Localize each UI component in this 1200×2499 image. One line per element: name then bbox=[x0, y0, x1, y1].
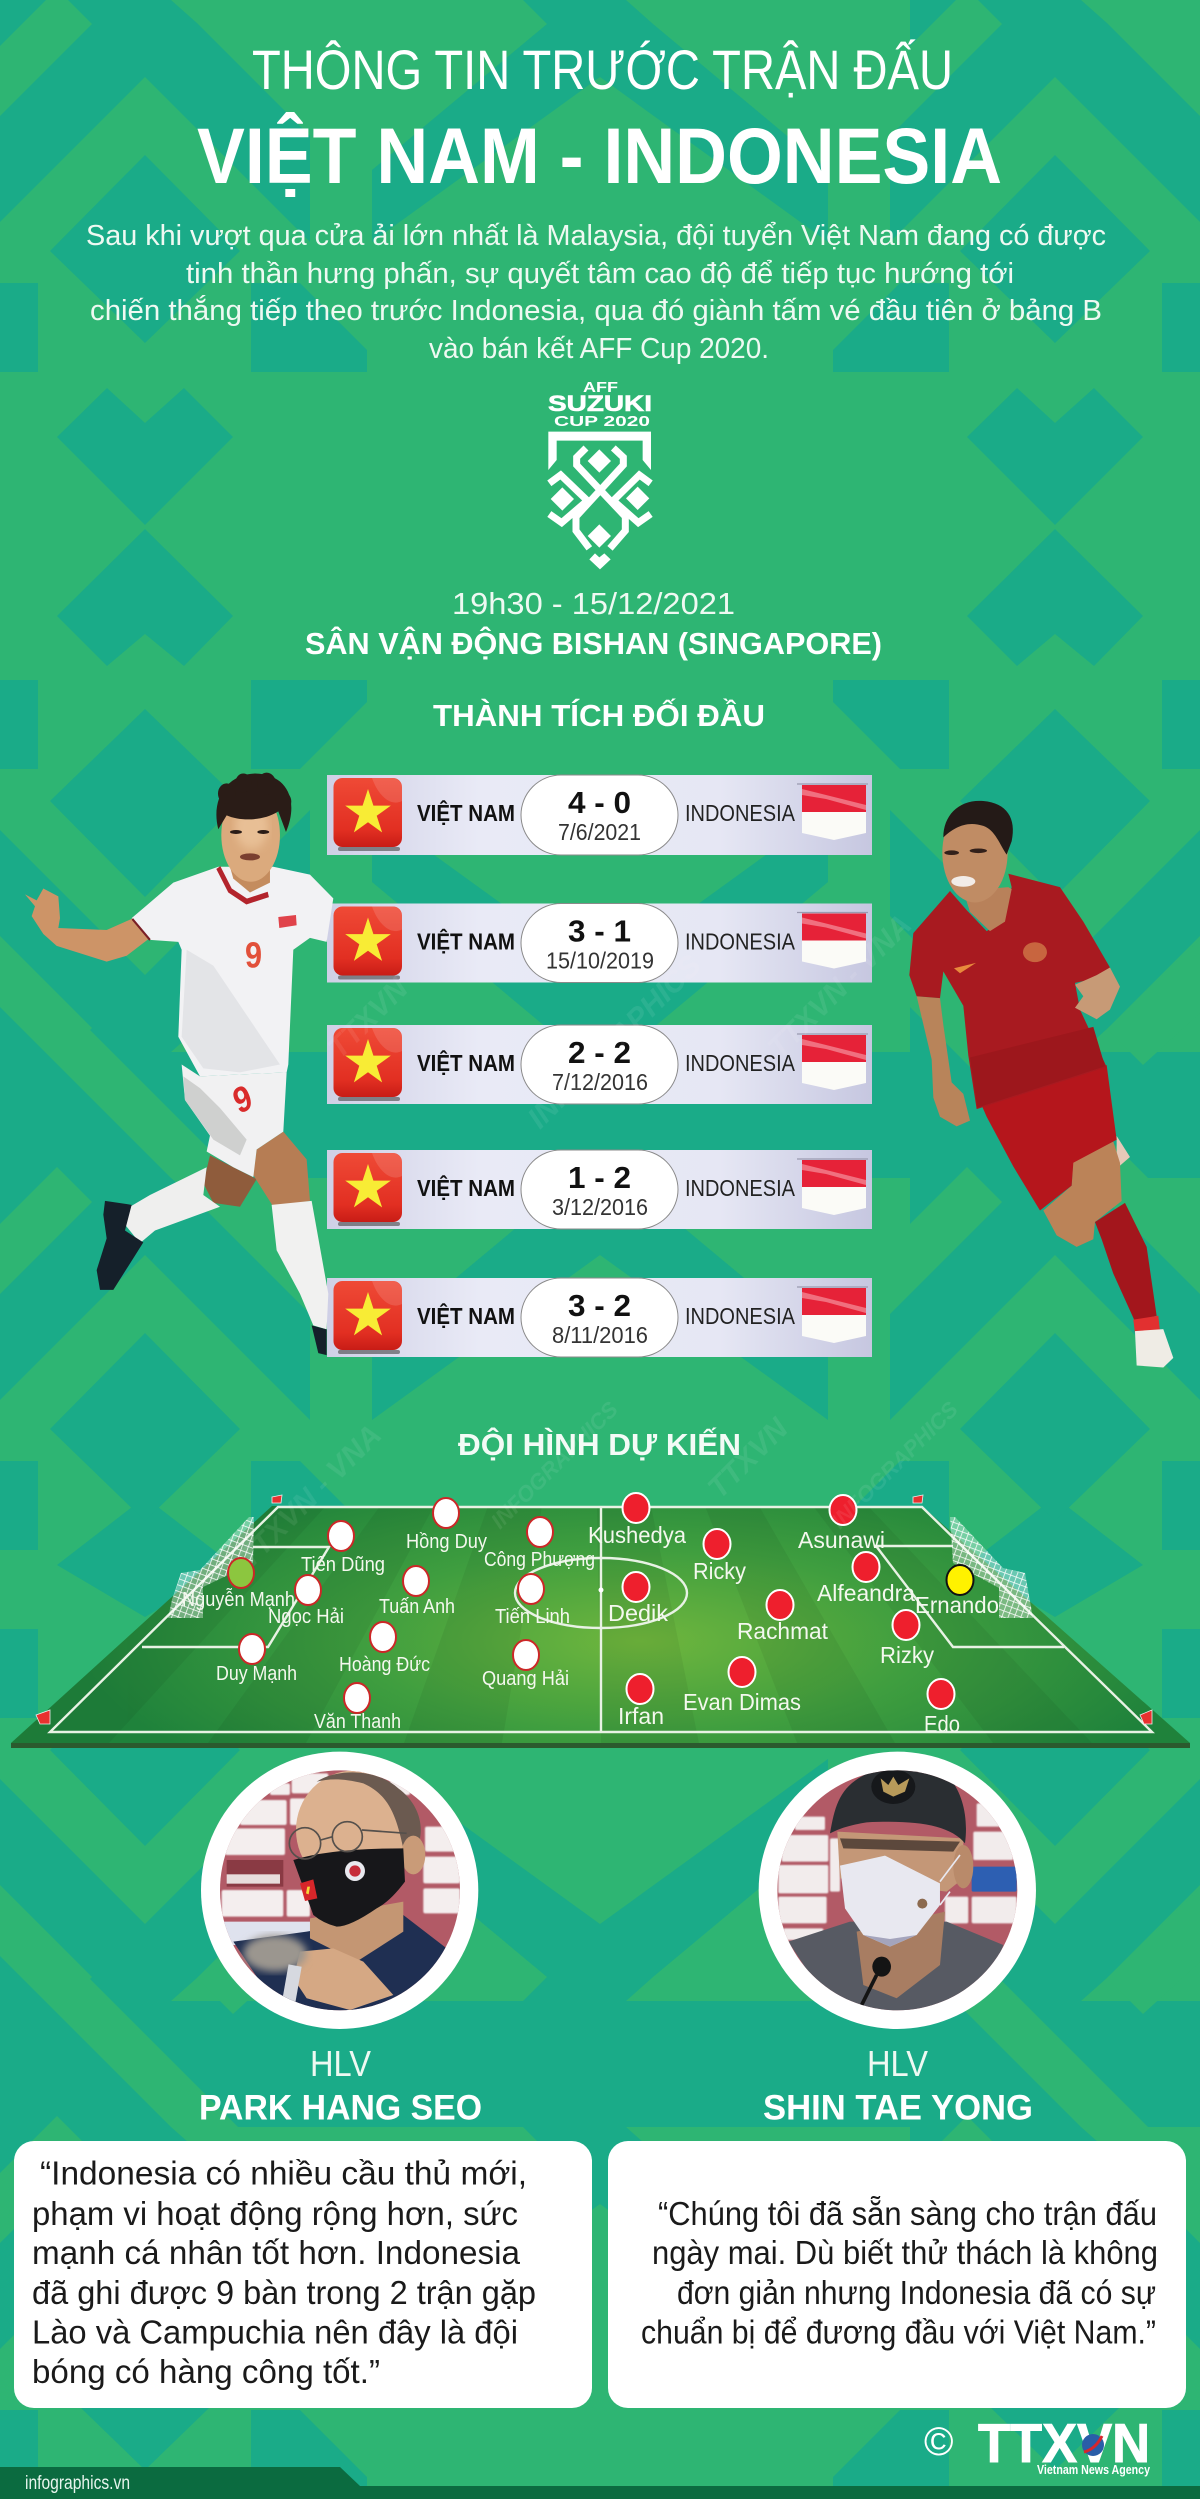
result row 5 bbox=[327, 1278, 872, 1357]
lineup: Vietnam: Hoàng Đức bbox=[339, 1654, 430, 1676]
stadium: SÂN VẬN ĐỘNG BISHAN (SINGAPORE) bbox=[305, 625, 882, 661]
lineup: Indonesia: Asunawi bbox=[798, 1527, 885, 1553]
result row 2: VIỆT NAM bbox=[417, 928, 515, 954]
watermarks: TTXVN bbox=[322, 971, 415, 1065]
quote: Park Hang Seo: mạnh cá nhân tốt hơn. Indonesia bbox=[32, 2234, 521, 2271]
footer bar: infographics.vn bbox=[25, 2473, 130, 2494]
heading: head to head: THÀNH TÍCH ĐỐI ĐẦU bbox=[433, 697, 765, 733]
label: coach Park Hang Seo: PARK HANG SEO bbox=[199, 2088, 482, 2128]
lineup: Indonesia: Alfeandra bbox=[817, 1580, 915, 1606]
result row 1: INDONESIA bbox=[685, 800, 796, 826]
icon: AFF Suzuki Cup 2020 logo: AFF bbox=[583, 379, 618, 396]
quote: Shin Tae Yong bbox=[608, 2141, 1186, 2408]
photo: coach Shin Tae Yong bbox=[758, 1752, 1036, 2029]
lineup: Indonesia: Dedik bbox=[608, 1600, 669, 1626]
lineup: Indonesia: Kushedya bbox=[588, 1522, 686, 1548]
lineup: Vietnam: Quang Hải bbox=[482, 1668, 569, 1690]
watermarks: TTXVN - VNA bbox=[232, 1418, 388, 1575]
title: VIỆT NAM - INDONESIA bbox=[197, 111, 1002, 200]
quote: Shin Tae Yong: “Chúng tôi đã sẵn sàng cho trận đấu bbox=[658, 2195, 1157, 2232]
watermarks: TTXVN bbox=[702, 1411, 795, 1505]
football pitch bbox=[11, 1495, 1190, 1748]
title bbox=[197, 38, 1002, 200]
quote: Shin Tae Yong: đơn giản nhưng Indonesia đã có sự bbox=[677, 2274, 1156, 2311]
lineup: Indonesia: Evan Dimas bbox=[683, 1689, 801, 1715]
quote: Park Hang Seo: “Indonesia có nhiều cầu thủ mới, bbox=[40, 2154, 527, 2192]
watermarks: INFOGRAPHICS bbox=[522, 949, 708, 1135]
result row 4: INDONESIA bbox=[685, 1175, 796, 1201]
result row 5: 8/11/2016 bbox=[552, 1322, 648, 1348]
result row 3: VIỆT NAM bbox=[417, 1049, 515, 1076]
icon: AFF Suzuki Cup 2020 logo: CUP 2020 bbox=[554, 413, 650, 430]
lineup: Vietnam: Văn Thanh bbox=[314, 1711, 401, 1733]
result row 3: 7/12/2016 bbox=[552, 1069, 648, 1095]
lineup: Vietnam bbox=[182, 1498, 595, 1733]
icon: TTXVN logo: Vietnam News Agency bbox=[1037, 2462, 1151, 2477]
result row 3: 2 - 2 bbox=[568, 1035, 631, 1070]
intro paragraph: chiến thắng tiếp theo trước Indonesia, qua đó giành tấm vé đầu tiên ở bảng B bbox=[90, 294, 1102, 327]
heading: lineup: ĐỘI HÌNH DỰ KIẾN bbox=[458, 1426, 741, 1462]
result row 1: 4 - 0 bbox=[568, 785, 631, 820]
intro paragraph: Sau khi vượt qua cửa ải lớn nhất là Malaysia, đội tuyển Việt Nam đang có được bbox=[86, 220, 1106, 252]
quote: Park Hang Seo: phạm vi hoạt động rộng hơn, sức bbox=[32, 2195, 518, 2232]
icon: TTXVN logo: © bbox=[924, 2420, 953, 2464]
result row 2: INDONESIA bbox=[685, 928, 796, 954]
label: coach Shin Tae Yong: SHIN TAE YONG bbox=[763, 2088, 1033, 2128]
label: coach Shin Tae Yong: HLV bbox=[867, 2043, 928, 2084]
result row 5: 3 - 2 bbox=[568, 1288, 631, 1323]
label: coach Park Hang Seo: HLV bbox=[310, 2043, 371, 2084]
intro paragraph bbox=[86, 220, 1106, 365]
icon: TTXVN logo: TTXVN bbox=[978, 2412, 1150, 2474]
watermarks bbox=[232, 908, 963, 1575]
lineup: Vietnam: Nguyễn Mạnh bbox=[182, 1588, 295, 1611]
watermarks: INFOGRAPHICS bbox=[826, 1396, 963, 1534]
result row 4: VIỆT NAM bbox=[417, 1174, 515, 1201]
lineup: Indonesia: Ernando bbox=[915, 1592, 999, 1618]
label: coach Park Hang Seo bbox=[199, 2043, 482, 2128]
lineup: Vietnam: Duy Mạnh bbox=[216, 1663, 297, 1685]
label: coach Shin Tae Yong bbox=[763, 2043, 1033, 2128]
title: THÔNG TIN TRƯỚC TRẬN ĐẤU bbox=[252, 38, 953, 101]
result row 3: INDONESIA bbox=[685, 1050, 796, 1076]
intro paragraph: tinh thần hưng phấn, sự quyết tâm cao độ để tiếp tục hướng tới bbox=[186, 258, 1014, 290]
result row 1: 7/6/2021 bbox=[558, 819, 641, 845]
result row 1 bbox=[327, 775, 872, 855]
watermarks: TTXVN - VNA bbox=[762, 908, 918, 1065]
result row 4: 1 - 2 bbox=[568, 1160, 631, 1195]
photo: Vietnam player bbox=[25, 773, 333, 1355]
result row 4: 3/12/2016 bbox=[552, 1194, 648, 1220]
icon: AFF Suzuki Cup 2020 logo bbox=[548, 379, 652, 569]
lineup: Indonesia: Rizky bbox=[880, 1642, 934, 1668]
result row 2: 3 - 1 bbox=[568, 914, 631, 948]
lineup: Vietnam: Tuấn Anh bbox=[379, 1596, 455, 1618]
lineup: Vietnam: Tiến Linh bbox=[495, 1606, 570, 1628]
lineup: Vietnam: Ngọc Hải bbox=[268, 1606, 344, 1628]
lineup: Indonesia: Edo bbox=[924, 1711, 960, 1737]
lineup: Vietnam: Hồng Duy bbox=[406, 1531, 487, 1553]
photo: Vietnam player: 9 bbox=[228, 1078, 258, 1122]
result row 5: VIỆT NAM bbox=[417, 1302, 515, 1329]
photo: Indonesia player bbox=[909, 801, 1173, 1367]
intro paragraph: vào bán kết AFF Cup 2020. bbox=[429, 333, 769, 365]
match date: 19h30 - 15/12/2021 bbox=[452, 586, 735, 621]
result row 1: VIỆT NAM bbox=[417, 799, 515, 826]
quote: Park Hang Seo bbox=[14, 2141, 592, 2408]
result row 2: 15/10/2019 bbox=[546, 948, 654, 974]
quote: Shin Tae Yong: chuẩn bị để đương đầu với Việt Nam.” bbox=[641, 2314, 1156, 2350]
icon: AFF Suzuki Cup 2020 logo: SUZUKI bbox=[548, 391, 652, 416]
footer bar bbox=[0, 2467, 1200, 2499]
quote: Park Hang Seo: Lào và Campuchia nên đây là đội bbox=[32, 2314, 518, 2350]
lineup: Indonesia: Rachmat bbox=[737, 1618, 829, 1644]
lineup: Vietnam: Công Phượng bbox=[484, 1549, 595, 1571]
result row 4 bbox=[327, 1150, 872, 1229]
result row 5: INDONESIA bbox=[685, 1303, 796, 1329]
lineup: Indonesia: Ricky bbox=[693, 1558, 746, 1584]
photo: coach Park Hang Seo bbox=[201, 1752, 478, 2029]
quote: Shin Tae Yong: ngày mai. Dù biết thử thách là không bbox=[652, 2234, 1158, 2271]
photo: Vietnam player: 9 bbox=[245, 936, 262, 976]
lineup: Vietnam: Tiến Dũng bbox=[301, 1554, 385, 1576]
lineup: Indonesia: Irfan bbox=[618, 1703, 664, 1729]
result row 2 bbox=[327, 904, 872, 982]
quote: Park Hang Seo: bóng có hàng công tốt.” bbox=[32, 2353, 380, 2390]
quote: Park Hang Seo: đã ghi được 9 bàn trong 2 trận gặp bbox=[32, 2274, 536, 2311]
watermarks: INFOGRAPHICS bbox=[486, 1396, 623, 1534]
lineup: Indonesia bbox=[588, 1493, 999, 1737]
result row 3 bbox=[327, 1025, 872, 1104]
